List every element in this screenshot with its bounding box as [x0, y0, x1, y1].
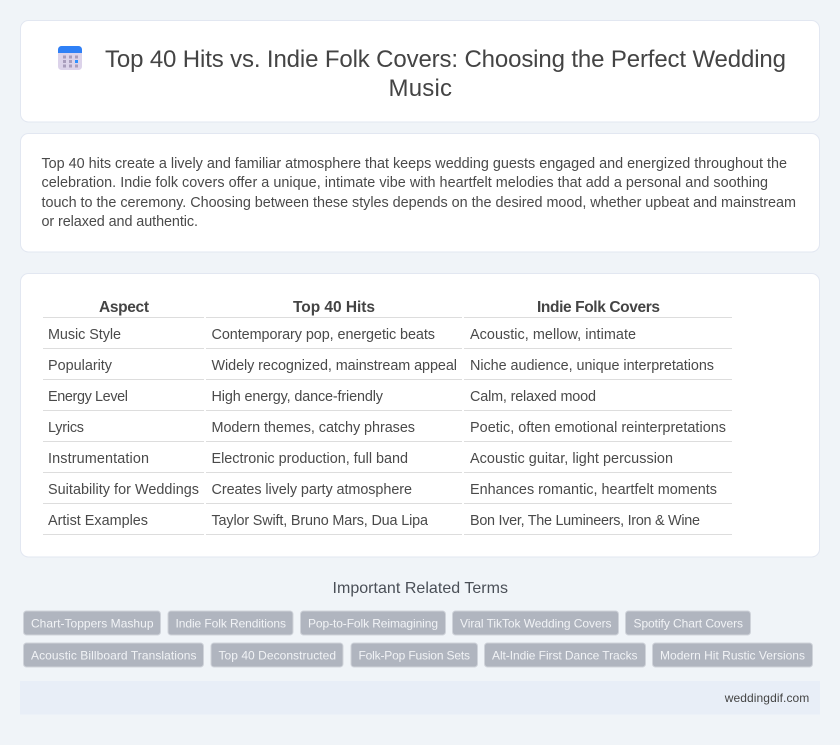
tag: Folk-Pop Fusion Sets	[351, 643, 478, 667]
tag: Alt-Indie First Dance Tracks	[484, 643, 646, 667]
table row: Instrumentation: Electronic production, full band	[212, 451, 408, 467]
table row: Music Style: Acoustic, mellow, intimate	[470, 327, 636, 343]
table row: Energy Level: Calm, relaxed mood	[470, 389, 596, 405]
title: Top 40 Hits vs. Indie Folk Covers: Choosing the Perfect Wedding	[105, 46, 786, 73]
table row: Music Style: Contemporary pop, energetic beats	[212, 327, 435, 343]
panel: introduction text	[20, 134, 820, 252]
tag: Chart-Toppers Mashup: Chart-Toppers Mashup	[31, 616, 154, 630]
table row: Suitability for Weddings: Creates lively party atmosphere	[212, 482, 412, 498]
tag: Chart-Toppers Mashup	[24, 611, 160, 635]
table row: Artist Examples: Artist Examples	[48, 513, 148, 529]
tag: Spotify Chart Covers	[626, 611, 750, 635]
title	[105, 46, 786, 102]
table header row: Indie Folk Covers	[537, 299, 660, 316]
footer	[20, 681, 820, 714]
table row: Artist Examples: Taylor Swift, Bruno Mars, Dua Lipa	[212, 513, 428, 529]
table row: Popularity: Popularity	[48, 358, 113, 374]
table row: Popularity: Niche audience, unique interpretations	[470, 358, 714, 374]
tag: Viral TikTok Wedding Covers	[452, 611, 618, 635]
tag: Pop-to-Folk Reimagining: Pop-to-Folk Reimagining	[308, 616, 438, 630]
text block: introduction	[42, 156, 796, 230]
table row: Instrumentation: Acoustic guitar, light percussion	[470, 451, 673, 467]
icon: calendar	[58, 46, 82, 70]
table row: Popularity: Widely recognized, mainstream appeal	[212, 358, 457, 374]
panel: title header	[20, 20, 820, 122]
heading: related terms: Important Related Terms	[332, 580, 508, 597]
table row: Lyrics: Lyrics	[48, 420, 84, 436]
text block: introduction: touch to the ceremony. Choosing between these styles depends on the desired mood, whether upbeat and mainstream	[42, 195, 796, 211]
table header row: Aspect	[99, 299, 149, 316]
table row: Energy Level: Energy Level	[48, 389, 128, 405]
table row: Artist Examples	[43, 513, 732, 535]
footer source text: weddingdif.com	[724, 691, 809, 705]
tag: Acoustic Billboard Translations	[24, 643, 204, 667]
table row: Lyrics: Poetic, often emotional reinterpretations	[470, 420, 726, 436]
text block: introduction: or relaxed and authentic.	[42, 214, 198, 230]
tag: Viral TikTok Wedding Covers: Viral TikTok Wedding Covers	[460, 616, 612, 630]
tag: Alt-Indie First Dance Tracks: Alt-Indie First Dance Tracks	[492, 648, 638, 662]
tag: Spotify Chart Covers: Spotify Chart Covers	[634, 616, 743, 630]
table row: Lyrics: Modern themes, catchy phrases	[212, 420, 415, 436]
table row: Artist Examples: Bon Iver, The Lumineers, Iron & Wine	[470, 513, 700, 529]
text block: introduction: Top 40 hits create a lively and familiar atmosphere that keeps wedding guests engaged and energized throughout the	[42, 156, 787, 172]
tag: Folk-Pop Fusion Sets: Folk-Pop Fusion Sets	[358, 648, 470, 662]
tag: Pop-to-Folk Reimagining	[300, 611, 446, 635]
table row: Instrumentation	[43, 451, 732, 473]
table row: Instrumentation: Instrumentation	[48, 451, 149, 467]
panel: comparison table	[20, 274, 820, 557]
tag: Indie Folk Renditions: Indie Folk Renditions	[176, 616, 286, 630]
text block: introduction: celebration. Indie folk covers offer a unique, intimate vibe with heartfelt melodies that add a personal and soothing	[42, 175, 768, 191]
table header row: Top 40 Hits	[293, 299, 375, 316]
tag: Modern Hit Rustic Versions	[652, 643, 812, 667]
table row: Music Style	[43, 327, 732, 349]
tag: Modern Hit Rustic Versions: Modern Hit Rustic Versions	[660, 648, 805, 662]
table row: Suitability for Weddings	[43, 482, 732, 504]
table row: Suitability for Weddings: Enhances romantic, heartfelt moments	[470, 482, 717, 498]
table header row	[43, 299, 732, 318]
tag: Top 40 Deconstructed	[211, 643, 343, 667]
table row: Energy Level	[43, 389, 732, 411]
tag: Indie Folk Renditions	[168, 611, 293, 635]
table row: Popularity	[43, 358, 732, 380]
table row: Music Style: Music Style	[48, 327, 121, 343]
tag: Top 40 Deconstructed: Top 40 Deconstructed	[218, 648, 336, 662]
table row: Lyrics	[43, 420, 732, 442]
panel: related term tags	[24, 611, 812, 667]
table row: Energy Level: High energy, dance-friendly	[212, 389, 384, 405]
tag: Acoustic Billboard Translations: Acoustic Billboard Translations	[31, 648, 196, 662]
table row: Suitability for Weddings: Suitability for Weddings	[48, 482, 199, 498]
title: Music	[388, 75, 452, 102]
